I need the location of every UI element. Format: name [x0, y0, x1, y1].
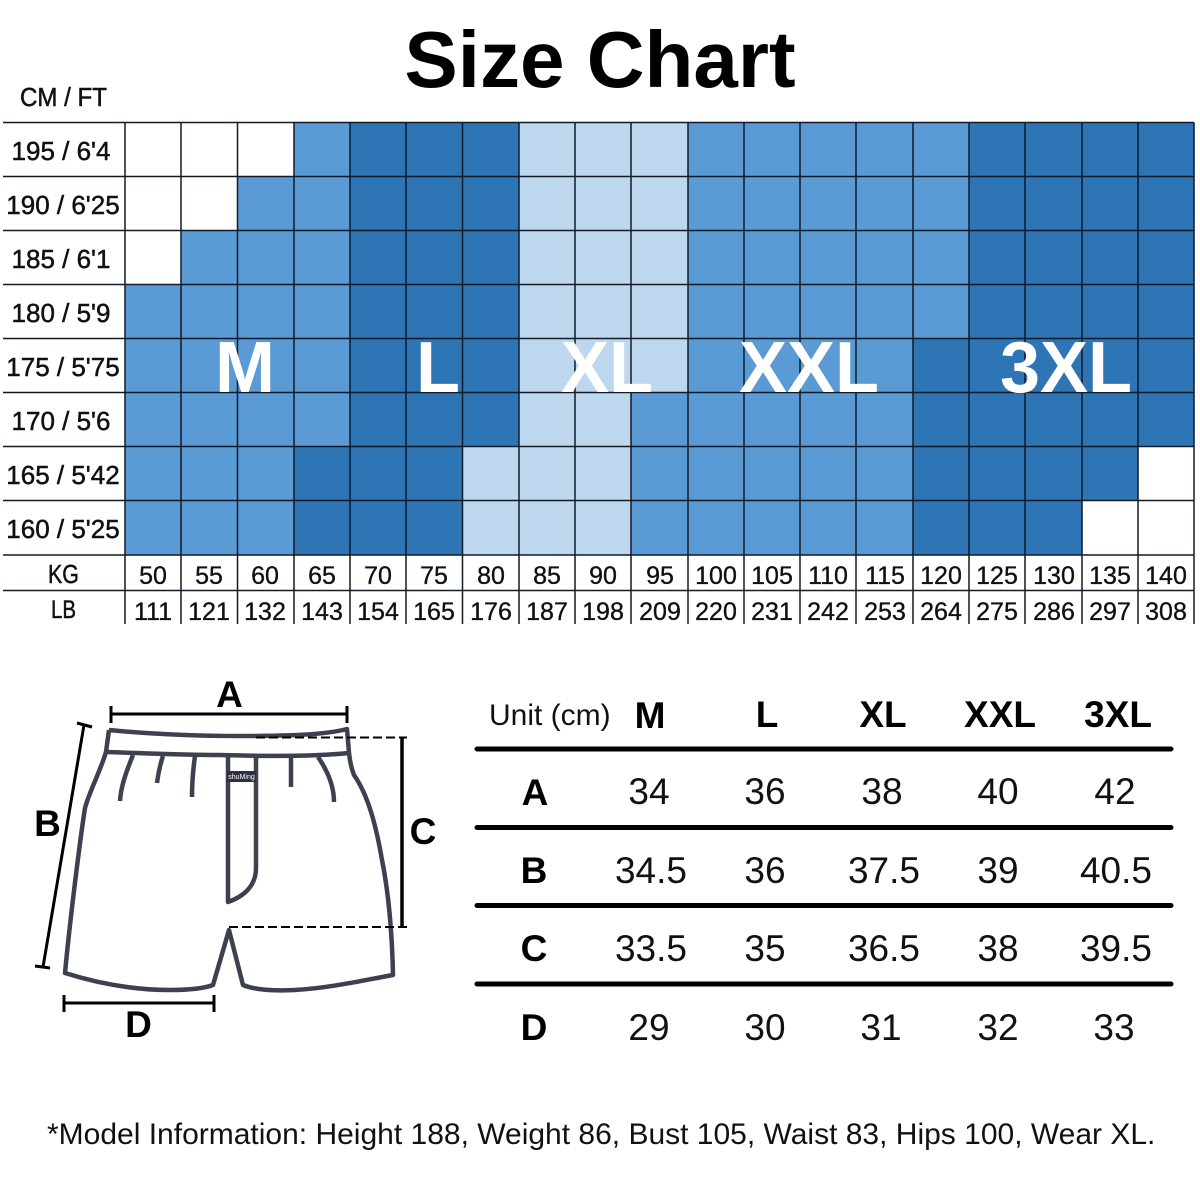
KG row: 130 — [1033, 562, 1075, 590]
row A — [522, 771, 1136, 813]
table header: XL — [859, 694, 907, 735]
LB row: 286 — [1033, 598, 1075, 626]
row D: 31 — [860, 1007, 902, 1048]
LB row: 154 — [357, 598, 399, 626]
title: Size Chart — [404, 15, 796, 104]
row D: D — [521, 1007, 547, 1048]
LB row: 264 — [920, 598, 962, 626]
size zone labels — [215, 328, 1132, 408]
height axis labels: 195 / 6'4 — [12, 136, 110, 166]
row B: 40.5 — [1080, 850, 1152, 891]
KG row: 105 — [751, 562, 793, 590]
row 170 cells — [125, 393, 1194, 447]
KG row: 65 — [308, 562, 336, 590]
size zone labels: L — [416, 328, 460, 408]
row C: 39.5 — [1080, 928, 1152, 969]
KG row: 55 — [195, 562, 223, 590]
table header: Unit (cm) — [489, 699, 611, 732]
KG row: 90 — [589, 562, 617, 590]
LB row: 165 — [413, 598, 455, 626]
height axis labels: 170 / 5'6 — [12, 406, 110, 436]
KG row: 140 — [1145, 562, 1187, 590]
height axis labels: 160 / 5'25 — [6, 514, 120, 544]
height axis labels: 175 / 5'75 — [6, 352, 120, 382]
dimension B — [34, 723, 92, 968]
dimension D: D — [125, 1004, 152, 1045]
KG row: 120 — [920, 562, 962, 590]
row C: C — [521, 928, 547, 969]
waistband brand tag — [227, 771, 256, 782]
row A: 42 — [1094, 771, 1136, 812]
dimension A — [111, 674, 347, 723]
LB row: 176 — [470, 598, 512, 626]
row 180 cells — [125, 285, 1194, 339]
LB row: 231 — [751, 598, 793, 626]
row D: 32 — [977, 1007, 1019, 1048]
table header: 3XL — [1084, 694, 1152, 735]
row D: 29 — [628, 1007, 670, 1048]
KG row: 70 — [364, 562, 392, 590]
LB row: 111 — [134, 598, 172, 626]
row 190 cells — [238, 177, 1194, 231]
row B: B — [521, 850, 547, 891]
LB row: 308 — [1145, 598, 1187, 626]
table header: L — [756, 694, 778, 735]
row 195 cells — [294, 123, 1194, 177]
KG row: 80 — [477, 562, 505, 590]
row D — [521, 1007, 1135, 1048]
row 165 cells — [125, 447, 1138, 501]
row C: 35 — [744, 928, 786, 969]
row B — [521, 850, 1152, 891]
row A: 38 — [861, 771, 903, 812]
shorts diagram — [34, 674, 436, 1045]
height axis labels: 190 / 6'25 — [6, 190, 120, 220]
KG row: 85 — [533, 562, 561, 590]
height axis labels: 180 / 5'9 — [12, 298, 110, 328]
LB row: 132 — [244, 598, 286, 626]
table header: XXL — [964, 694, 1036, 735]
measurement table — [477, 694, 1171, 1048]
height axis labels: 165 / 5'42 — [6, 460, 120, 490]
dimension A: A — [216, 674, 243, 715]
dimension C: C — [410, 811, 436, 852]
size zone labels: XXL — [739, 328, 879, 408]
KG row: 50 — [139, 562, 167, 590]
row 175 cells — [125, 339, 1194, 393]
size zone labels: 3XL — [1000, 328, 1132, 408]
LB row: 297 — [1089, 598, 1131, 626]
row C: 38 — [977, 928, 1019, 969]
size zone labels: M — [215, 328, 275, 408]
dimension B: B — [34, 803, 61, 844]
LB row: 242 — [807, 598, 849, 626]
row C: 33.5 — [615, 928, 687, 969]
row C: 36.5 — [848, 928, 920, 969]
KG row: 125 — [976, 562, 1018, 590]
row B: 34.5 — [615, 850, 687, 891]
shorts outline — [65, 729, 393, 990]
LB row: 198 — [582, 598, 624, 626]
KG row — [48, 559, 1187, 590]
height axis labels — [6, 82, 120, 544]
KG row: 95 — [646, 562, 674, 590]
KG row: 110 — [808, 562, 848, 590]
LB row: 253 — [864, 598, 906, 626]
LB row: 121 — [188, 598, 230, 626]
row A: 34 — [628, 771, 670, 812]
row D: 33 — [1093, 1007, 1135, 1048]
LB row: LB — [51, 596, 76, 624]
row 160 cells — [125, 501, 1082, 555]
LB row: 187 — [526, 598, 568, 626]
row A: 36 — [744, 771, 786, 812]
row C — [521, 928, 1152, 969]
size grid chart — [3, 82, 1194, 626]
row A: A — [522, 772, 548, 813]
table header — [489, 694, 1152, 736]
model information footnote: *Model Information: Height 188, Weight 86, Bust 105, Waist 83, Hips 100, Wear XL. — [47, 1118, 1155, 1151]
KG row: 100 — [695, 562, 737, 590]
KG row: 115 — [865, 562, 905, 590]
KG row: 75 — [420, 562, 448, 590]
table header: M — [635, 695, 665, 736]
height axis labels: CM / FT — [20, 82, 107, 112]
row 185 cells — [181, 231, 1194, 285]
row B: 36 — [744, 850, 786, 891]
KG row: 60 — [251, 562, 279, 590]
LB row: 143 — [301, 598, 343, 626]
row A: 40 — [977, 771, 1019, 812]
row B: 37.5 — [848, 850, 920, 891]
height axis labels: 185 / 6'1 — [12, 244, 110, 274]
size zone labels: XL — [561, 328, 653, 408]
KG row: 135 — [1089, 562, 1131, 590]
LB row: 209 — [639, 598, 681, 626]
LB row: 220 — [695, 598, 737, 626]
LB row: 275 — [976, 598, 1018, 626]
KG row: KG — [48, 559, 79, 589]
dimension C — [229, 737, 436, 927]
waistband brand tag: shuMing — [228, 774, 255, 781]
LB row — [51, 596, 1187, 626]
row D: 30 — [744, 1007, 786, 1048]
row B: 39 — [977, 850, 1019, 891]
dimension D — [64, 995, 214, 1045]
